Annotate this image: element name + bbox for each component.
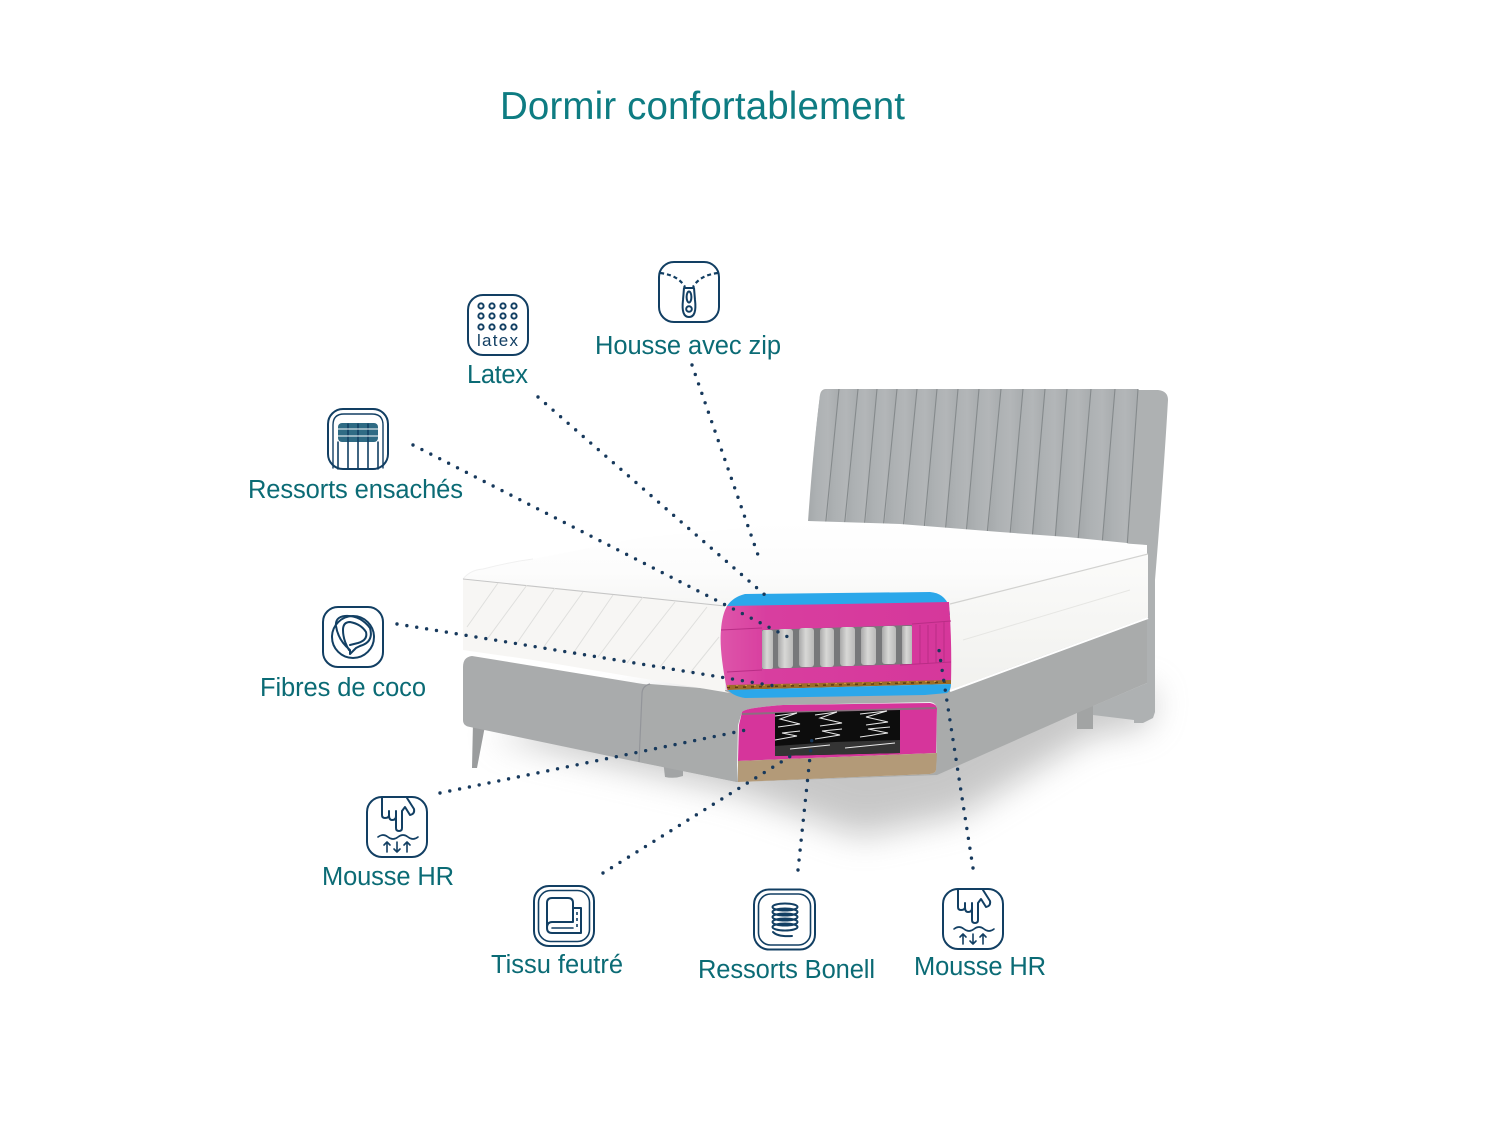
- label: Latex: Latex: [467, 361, 528, 389]
- illustration: bed with mattress cutaway: [463, 389, 1168, 836]
- label: Ressorts Bonell: Ressorts Bonell: [698, 956, 875, 984]
- base right section: [639, 617, 1147, 782]
- pink foam frame: [738, 703, 937, 761]
- coconut fibre layer: [727, 680, 951, 690]
- icon: coconut fibre: [323, 607, 383, 667]
- front foot: [663, 760, 683, 778]
- leader line: Latex: [538, 397, 765, 595]
- label: Housse avec zip: Housse avec zip: [595, 332, 781, 360]
- base left section: [463, 656, 737, 782]
- label: Tissu feutré: Tissu feutré: [491, 951, 623, 979]
- label: Ressorts ensachés: Ressorts ensachés: [248, 476, 463, 504]
- mattress right face: [950, 554, 1148, 691]
- title: Dormir confortablement: [500, 85, 905, 128]
- label: Mousse HR right: Mousse HR: [914, 953, 1046, 981]
- pocket springs: [762, 625, 912, 669]
- foam seams: [721, 621, 951, 672]
- mattress top: [463, 521, 1148, 606]
- Bonell springs: [775, 710, 900, 756]
- icon: zip: [659, 262, 719, 322]
- icon: latex: latex: [477, 331, 518, 350]
- tapered leg: [472, 722, 485, 768]
- leader line: Housse avec zip: [692, 365, 758, 555]
- leader line: Mousse HR right: [939, 650, 973, 868]
- icon: Bonell spring: [754, 890, 815, 950]
- blue top layer: [725, 592, 950, 615]
- cutaway: base: [737, 702, 937, 782]
- icon: pocket springs: [328, 409, 388, 469]
- floor shadow: [490, 690, 1155, 836]
- leader line: Ressorts ensachés: [413, 445, 790, 638]
- icon: foam press left: [367, 797, 427, 857]
- rear foot: [1077, 705, 1093, 729]
- icon: foam press right: [943, 889, 1003, 949]
- pink foam: [721, 602, 951, 690]
- leader line: Mousse HR left: [440, 730, 746, 793]
- tan felt: [738, 753, 937, 782]
- leader line: Fibres de coco: [397, 624, 775, 686]
- mattress left face: [463, 579, 730, 693]
- leader line: Tissu feutré: [603, 754, 794, 873]
- blue bottom layer: [728, 684, 951, 698]
- icon: latex: [468, 295, 528, 355]
- leader line: Ressorts Bonell: [798, 738, 812, 870]
- cutaway: mattress: [721, 592, 951, 698]
- label: Fibres de coco: Fibres de coco: [260, 674, 426, 702]
- icon: felt fabric: [534, 886, 594, 946]
- label: Mousse HR left: Mousse HR: [322, 863, 454, 891]
- headboard: [807, 389, 1168, 723]
